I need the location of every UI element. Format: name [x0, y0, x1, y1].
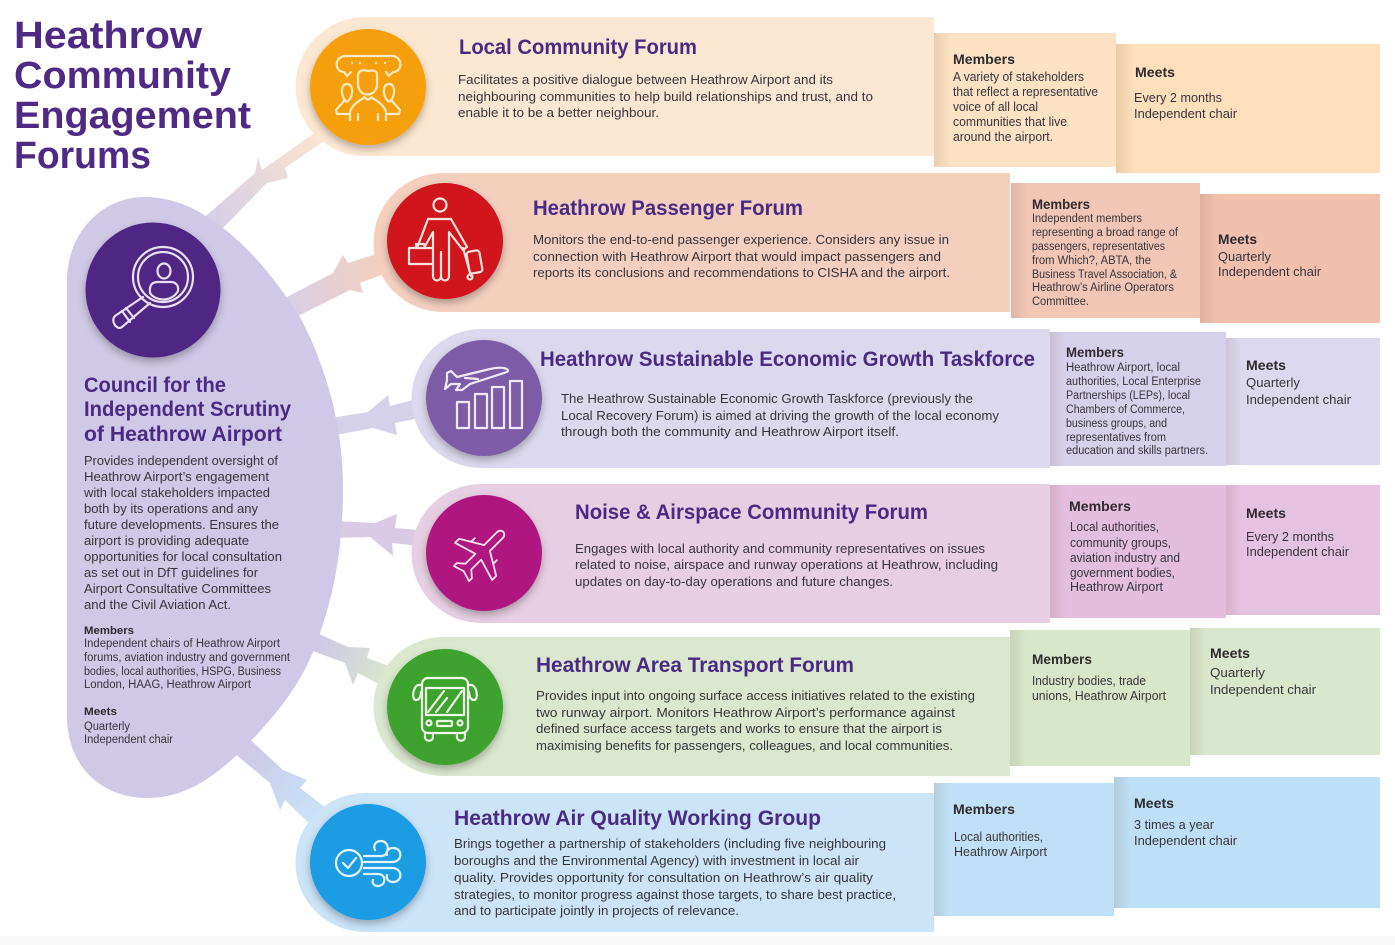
- meets panel: Independent chair: [1134, 833, 1238, 848]
- description: through both the community and Heathrow Airport itself.: [561, 424, 899, 439]
- description: strategies, to monitor progress against those targets, to share best practice,: [454, 887, 896, 902]
- meets panel: [1226, 338, 1380, 465]
- members panel: government bodies,: [1070, 566, 1175, 580]
- description: [533, 232, 950, 280]
- text: council meets: [84, 706, 173, 746]
- heading: council: [84, 374, 291, 446]
- members panel: voice of all local: [953, 100, 1038, 114]
- description: Brings together a partnership of stakeholders (including five neighbouring: [454, 836, 886, 851]
- members panel: communities that live: [953, 115, 1067, 129]
- arrow: Noise Forum to Council: [335, 514, 430, 556]
- description: Monitors the end-to-end passenger experience. Considers any issue in: [533, 232, 949, 247]
- heading: Heathrow Passenger Forum: [533, 197, 803, 220]
- icon: bus: [387, 649, 503, 765]
- members panel: Business Travel Association, &: [1032, 269, 1177, 281]
- members panel: Members: [1066, 344, 1124, 360]
- panel: Local Community Forum: [296, 17, 1380, 173]
- members panel: Local authorities,: [1070, 520, 1159, 534]
- meets panel: Quarterly: [1246, 375, 1300, 390]
- meets panel: [1114, 777, 1380, 908]
- title: Heathrow: [14, 15, 202, 57]
- members panel: representing a broad range of: [1032, 227, 1179, 239]
- panel: Heathrow Air Quality Working Group: [296, 777, 1380, 932]
- members panel: Members: [1032, 651, 1092, 667]
- text: council members: bodies, local authorities, HSPG, Business: [84, 666, 281, 678]
- members panel: [1010, 630, 1190, 766]
- meets panel: Independent chair: [1218, 264, 1322, 279]
- icon: people talking: [310, 29, 426, 145]
- text: council meets: Independent chair: [84, 734, 173, 746]
- members panel: community groups,: [1070, 536, 1171, 550]
- meets panel: Meets: [1134, 795, 1174, 811]
- text: council description: Provides independent oversight of: [84, 453, 278, 468]
- text: council description: with local stakeholders impacted: [83, 485, 270, 500]
- description: [561, 391, 1000, 439]
- members panel: Local authorities,: [954, 830, 1043, 844]
- text: council description: Airport Consultative Committees: [84, 581, 271, 596]
- description: related to noise, airspace and runway operations at Heathrow, including: [575, 557, 998, 572]
- heading: council: Independent Scrutiny: [84, 398, 291, 421]
- members panel: [934, 783, 1114, 916]
- icon: traveller with luggage: [387, 183, 503, 299]
- arrow: Local Community Forum to Council: [195, 122, 340, 240]
- members panel: [1050, 332, 1226, 466]
- meets panel: Quarterly: [1210, 665, 1266, 680]
- members panel: representatives from: [1066, 432, 1166, 444]
- description: connection with Heathrow Airport that would impact passengers and: [533, 249, 941, 264]
- arrow: Passenger Forum to Council: [275, 248, 400, 325]
- description: Facilitates a positive dialogue between Heathrow Airport and its: [458, 72, 834, 87]
- meets panel: [1116, 44, 1380, 173]
- members panel: [934, 33, 1116, 167]
- heading: Noise & Airspace Community Forum: [575, 501, 928, 524]
- heading: Heathrow Sustainable Economic Growth Taskforce: [540, 348, 1035, 371]
- meets panel: Meets: [1218, 231, 1257, 247]
- text: council description: as set out in DfT guidelines for: [84, 565, 259, 580]
- text: council meets: Quarterly: [84, 721, 130, 733]
- icon: air with check mark: [310, 804, 426, 920]
- arrow: Air Quality Group to Council: [228, 733, 335, 832]
- meets panel: Meets: [1246, 357, 1286, 373]
- members panel: business groups, and: [1066, 418, 1167, 430]
- meets panel: [1226, 485, 1380, 615]
- description: maximising benefits for passengers, colleagues, and local communities.: [536, 738, 953, 753]
- heading: council: of Heathrow Airport: [84, 423, 282, 446]
- members panel: Members: [1032, 196, 1090, 212]
- members panel: A variety of stakeholders: [953, 70, 1084, 84]
- description: reports its conclusions and recommendations to CISHA and the airport.: [533, 265, 950, 280]
- members panel: Members: [953, 801, 1015, 817]
- text: council meets: Meets: [84, 706, 117, 718]
- description: boroughs and the Environmental Agency) with investment in local air: [454, 853, 860, 868]
- text: council members: Members: [84, 625, 134, 637]
- description: two runway airport. Monitors Heathrow Airport’s performance against: [536, 705, 955, 720]
- meets panel: [1200, 194, 1380, 323]
- description: [536, 688, 975, 753]
- members panel: authorities, Local Enterprise: [1066, 376, 1201, 388]
- members panel: Heathrow’s Airline Operators: [1032, 282, 1174, 294]
- members panel: from Which?, ABTA, the: [1032, 255, 1151, 267]
- text: council description: Heathrow Airport’s engagement: [84, 469, 269, 484]
- members panel: Heathrow Airport: [954, 845, 1048, 859]
- members panel: Industry bodies, trade: [1032, 674, 1146, 688]
- members panel: aviation industry and: [1070, 551, 1180, 565]
- heading: Heathrow Air Quality Working Group: [454, 807, 821, 830]
- description: and to participate jointly in projects of relevance.: [454, 903, 739, 918]
- description: [575, 541, 998, 589]
- meets panel: Meets: [1135, 64, 1175, 80]
- meets panel: Independent chair: [1246, 544, 1350, 559]
- text: council description: and the Civil Aviation Act.: [84, 597, 231, 612]
- meets panel: Every 2 months: [1246, 529, 1334, 544]
- panel: Council for the Independent Scrutiny of Heathrow Airport: [67, 197, 343, 798]
- description: Provides input into ongoing surface access initiatives related to the existing: [536, 688, 975, 703]
- description: updates on day-to-day operations and future changes.: [575, 574, 893, 589]
- meets panel: Independent chair: [1246, 392, 1352, 407]
- text: council description: both by its operations and any: [84, 501, 258, 516]
- members panel: Heathrow Airport: [1070, 580, 1164, 594]
- text: council members: [84, 625, 291, 691]
- members panel: Chambers of Commerce,: [1066, 404, 1185, 416]
- arrow: Economic Growth Taskforce to Council: [325, 395, 425, 437]
- meets panel: Independent chair: [1210, 682, 1317, 697]
- members panel: unions, Heathrow Airport: [1032, 689, 1167, 703]
- text: council members: Independent chairs of Heathrow Airport: [84, 638, 281, 650]
- title: Engagement: [14, 95, 251, 137]
- members panel: Partnerships (LEPs), local: [1066, 390, 1190, 402]
- title: Community: [14, 55, 231, 97]
- members panel: Committee.: [1032, 296, 1089, 308]
- description: The Heathrow Sustainable Economic Growth Taskforce (previously the: [561, 391, 973, 406]
- meets panel: [1190, 628, 1380, 755]
- heading: council: Council for the: [84, 374, 226, 397]
- members panel: Heathrow Airport, local: [1066, 362, 1180, 374]
- heading: Heathrow Area Transport Forum: [536, 654, 854, 677]
- description: Local Recovery Forum) is aimed at driving the growth of the local economy: [561, 408, 1000, 423]
- members panel: around the airport.: [953, 130, 1053, 144]
- text: council description: [83, 453, 282, 612]
- description: neighbouring communities to help build relationships and trust, and to: [458, 89, 873, 104]
- members panel: Members: [1069, 498, 1131, 514]
- icon: magnifying glass with person: [86, 222, 220, 358]
- title: Forums: [14, 135, 151, 177]
- meets panel: 3 times a year: [1134, 817, 1215, 832]
- members panel: [1050, 485, 1226, 618]
- panel: Heathrow Area Transport Forum: [374, 628, 1380, 776]
- heading: Local Community Forum: [459, 36, 697, 59]
- members panel: passengers, representatives: [1032, 241, 1165, 253]
- meets panel: Meets: [1210, 645, 1250, 661]
- description: Engages with local authority and community representatives on issues: [575, 541, 985, 556]
- title: [14, 15, 251, 177]
- meets panel: Independent chair: [1134, 106, 1238, 121]
- text: council description: future developments. Ensures the: [84, 517, 279, 532]
- panel: Heathrow Passenger Forum: [374, 173, 1380, 323]
- text: council members: London, HAAG, Heathrow Airport: [84, 679, 252, 691]
- text: council description: opportunities for local consultation: [84, 549, 282, 564]
- members panel: education and skills partners.: [1066, 445, 1208, 457]
- panel: Noise & Airspace Community Forum: [412, 484, 1380, 623]
- description: [454, 836, 896, 918]
- meets panel: Every 2 months: [1134, 90, 1222, 105]
- members panel: Independent members: [1032, 213, 1142, 225]
- description: enable it to be a better neighbour.: [458, 105, 659, 120]
- members panel: Members: [953, 51, 1015, 67]
- meets panel: Quarterly: [1218, 249, 1271, 264]
- members panel: [1011, 183, 1200, 318]
- text: council members: forums, aviation industry and government: [84, 652, 291, 664]
- description: defined surface access targets and works to ensure that the airport is: [536, 721, 943, 736]
- arrow: Transport Forum to Council: [305, 630, 400, 690]
- meets panel: Meets: [1246, 505, 1286, 521]
- icon: plane over bar chart: [426, 340, 542, 456]
- text: council description: airport is providing adequate: [84, 533, 249, 548]
- description: [458, 72, 873, 120]
- members panel: that reflect a representative: [953, 85, 1098, 99]
- description: quality. Provides opportunity for consultation on Heathrow’s air quality: [454, 870, 874, 885]
- icon: aeroplane: [426, 495, 542, 611]
- panel: Heathrow Sustainable Economic Growth Taskforce: [412, 329, 1380, 468]
